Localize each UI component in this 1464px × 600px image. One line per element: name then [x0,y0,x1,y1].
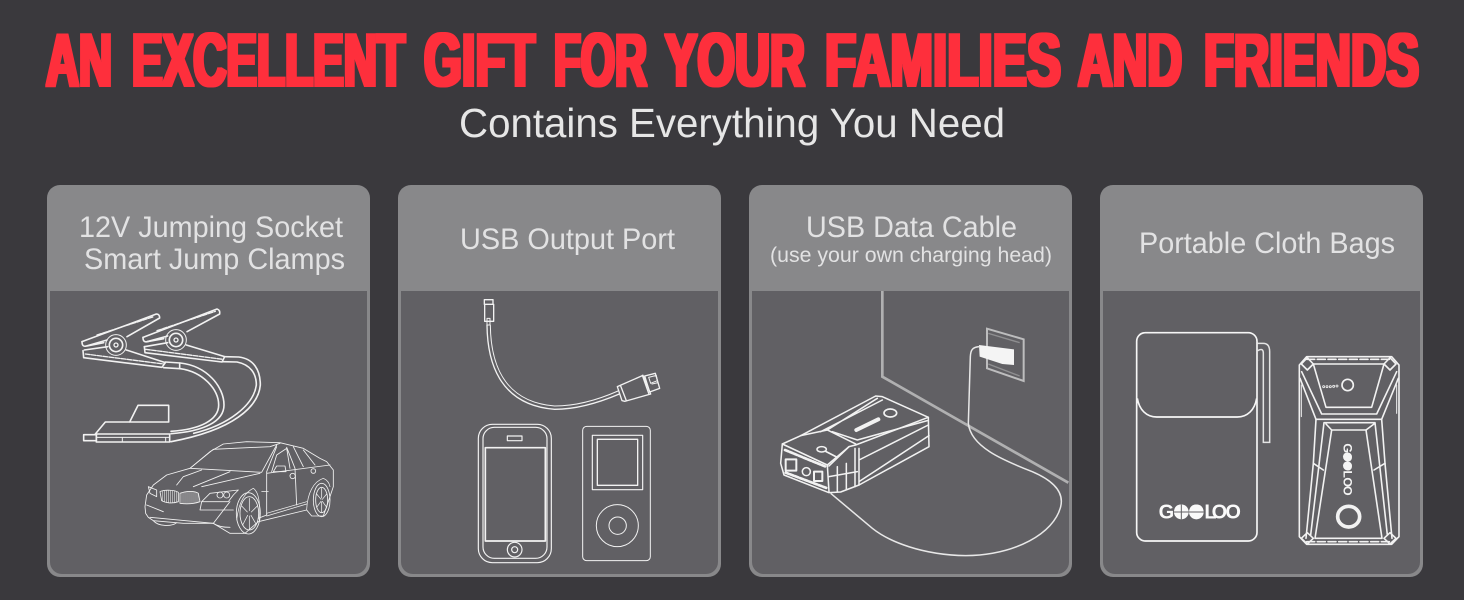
panel frame [47,185,370,577]
title: GIFT [424,18,535,102]
heading: jump clamps: 12V Jumping Socket [79,211,343,244]
title: FOR [554,18,647,102]
icon: jump clamps and socket [82,309,260,442]
title: AND [1078,18,1182,102]
panel image area [752,291,1069,574]
bag logo: GOOLOO [1159,502,1241,524]
heading: USB data cable [770,211,1052,267]
heading: jump clamps [79,211,345,276]
panel: portable cloth bags [1100,185,1423,577]
illustration: bag and jump starter [1137,333,1399,544]
title: FAMILIES [825,18,1061,102]
cable [831,347,1061,556]
panel frame [749,185,1072,577]
illustration: cable, phone and music player [478,300,660,563]
panel image area [1103,291,1420,574]
panel frame [1100,185,1423,577]
heading: jump clamps: Smart Jump Clamps [84,243,345,276]
heading: USB data cable: USB Data Cable [806,211,1017,244]
device logo: GOOLOO [1341,443,1355,496]
heading: USB output port: USB Output Port [460,223,675,256]
icon: jump starter [781,396,929,493]
heading: portable cloth bags: Portable Cloth Bags [1139,227,1395,260]
panel image area [401,291,718,574]
illustration: clamps, socket and car [82,309,333,534]
icon: phone [478,424,551,563]
icon: music player [583,426,650,561]
illustration: charging from a wall socket [781,291,1068,556]
icon: wall outlet and plug [979,329,1024,381]
subtitle: Contains Everything You Need [459,100,1005,146]
title [46,18,1419,102]
icon: jump starter, top view [1299,357,1399,544]
heading: USB data cable: (use your own charging head) [770,244,1052,267]
title: AN [46,18,112,102]
title: YOUR [665,18,805,102]
wall corner [882,291,1068,483]
icon: USB cable [484,300,660,409]
title: EXCELLENT [132,18,405,102]
panel: jump clamps [47,185,370,577]
panel image area [50,291,367,574]
icon: car [145,442,333,534]
panel frame [398,185,721,577]
panel: USB output port [398,185,721,577]
panel: USB data cable [749,185,1072,577]
icon: cloth bag [1137,333,1270,541]
